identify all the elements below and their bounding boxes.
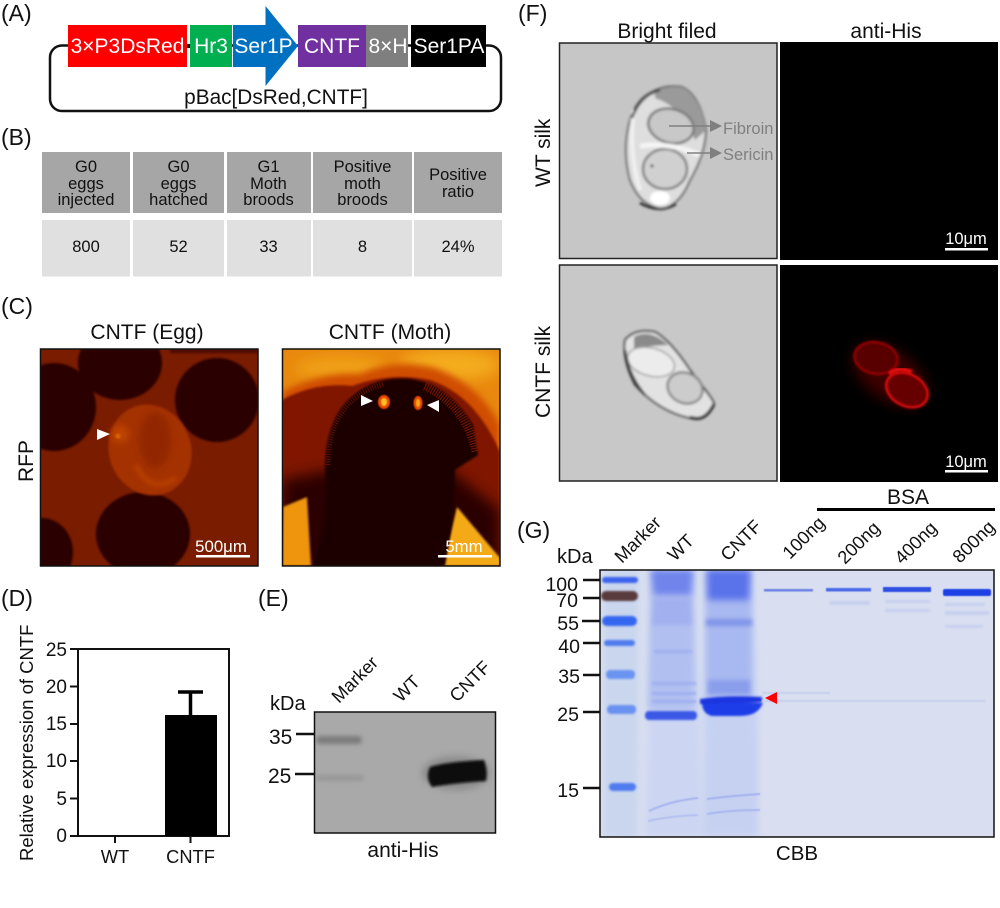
micrograph: WT silk bright field [559,43,777,259]
frame moth [282,349,500,566]
table header text: G0 [167,158,190,176]
y axis title: Relative expression of CNTF [16,625,37,861]
size numbers: 15 [557,780,579,802]
size markers: 25 [268,765,291,788]
table values: 33 [259,238,278,256]
BSA bands [764,587,991,596]
CNTF lane smear [703,630,758,836]
x labels [101,846,215,867]
table header [42,152,502,213]
y axis numbers: 5 [56,789,67,810]
blot frame [314,712,496,833]
arrowhead on egg [97,429,110,440]
table header text: eggs [161,175,196,193]
table header text: broods [337,191,388,209]
BSA header and bracket: BSA [887,486,929,509]
axis label RFP: RFP [15,440,38,482]
table header text: G0 [75,158,97,176]
table header text: injected [58,191,114,209]
lane labels: 400ng [890,517,941,568]
BSA header and bracket [817,486,995,511]
panel: C RFP images [1,293,500,586]
micrograph: WT silk anti-His [780,42,998,260]
x ticks [115,836,190,843]
title: CNTF (Moth): CNTF (Moth) [329,321,451,344]
linker [187,44,190,48]
size numbers: 100 [545,574,578,596]
micrograph: CNTF silk bright field [559,265,777,481]
element: Hr3: Hr3 [194,35,228,58]
y axis numbers [46,640,67,847]
lane labels: CNTF [716,516,765,565]
annotation: Sericin arrow and label [687,146,773,164]
panel: G gel [517,486,999,865]
y axis numbers: 10 [46,751,67,772]
table header text: ratio [442,183,474,201]
table header text: eggs [68,175,104,193]
gel frame [600,570,994,837]
element: Hr3 [190,25,232,67]
plasmid backbone loop [50,46,501,111]
main bands [645,696,763,720]
table header text: Positive [429,166,487,184]
table values row [42,220,502,276]
caption anti-His: anti-His [367,839,439,862]
panel label C: (C) [1,293,33,319]
y axis ticks [70,649,78,836]
table header text: G1 [257,158,280,176]
red arrowhead [765,692,777,704]
panel: E western blot [258,585,496,862]
lane labels [610,512,999,568]
kDa label: kDa [270,693,306,715]
lane labels: CNTF [445,657,494,706]
panel label A: (A) [1,0,32,26]
micrograph: egg [41,350,258,566]
lane labels [327,652,494,707]
element: 3xP3DsRed [68,25,187,67]
blot [314,712,495,833]
y axis numbers: 0 [56,826,67,847]
panel: B table [1,124,502,276]
CNTF bar [165,715,217,836]
element: CNTF: CNTF [304,35,360,58]
y axis numbers: 20 [46,677,67,698]
scale bar WT 10um: 10μm [945,230,987,248]
micrograph: CNTF silk anti-His [780,265,998,482]
arrowheads on moth [361,395,439,412]
table header text: hatched [149,191,208,209]
panel: F silk sections [518,0,998,482]
marker bands [601,577,638,791]
BSA minor bands [830,600,989,628]
marker ticks [295,734,314,774]
size markers [268,726,292,788]
title: CNTF (Egg): CNTF (Egg) [90,321,204,344]
element: CNTF [298,25,366,67]
element: Ser1P arrow [233,6,298,86]
size numbers: 35 [558,666,580,688]
caption CBB: CBB [776,842,818,865]
row title CNTF silk: CNTF silk [532,325,555,418]
panel label E: (E) [258,585,289,611]
table header text: moth [344,175,381,193]
panel label B: (B) [1,124,32,150]
lane labels: 200ng [833,517,884,568]
lane labels: WT [389,671,424,706]
frame egg [40,349,258,566]
frame CNTF bright field [560,265,777,481]
scale bar 500um: 500μm [195,537,247,556]
annotation: Fibroin arrow and label: Fibroin [723,120,773,138]
element: 8xH: 8×H [368,35,408,58]
gel image [600,570,994,837]
annotation: Fibroin arrow and label [669,120,773,138]
scale bar 5mm [438,537,492,558]
plasmid name: pBac[DsRed,CNTF] [184,86,368,109]
panel label F: (F) [518,0,547,26]
element: Ser1PA: Ser1PA [414,35,484,58]
row title WT silk: WT silk [532,118,555,187]
size ticks [582,580,600,788]
element: Ser1P arrow: Ser1P [234,35,293,58]
WT lane smear [646,709,700,836]
size numbers: 40 [558,636,580,658]
table values: 52 [169,238,188,256]
column title Bright filed: Bright filed [617,20,717,43]
y axis numbers: 15 [46,714,67,735]
y axis numbers: 25 [46,640,67,661]
table values [72,238,475,256]
lane labels: Marker [327,652,382,707]
scale bar 5mm: 5mm [445,537,483,556]
table header text: broods [243,191,294,209]
size numbers [545,574,580,802]
panel label D: (D) [1,585,33,611]
size numbers: 55 [557,613,579,635]
kDa label: kDa [557,546,593,568]
element: 3xP3DsRed: 3×P3DsRed [71,35,184,58]
panel: A construct map [1,0,501,111]
lane labels: Marker [610,512,665,567]
lane labels: 100ng [778,512,829,563]
table header text: Moth [250,175,287,193]
element: 8xH [366,25,408,67]
lane labels: 800ng [948,516,999,567]
size numbers: 70 [556,590,578,612]
table values: 800 [72,238,100,256]
table values: 8 [358,238,367,256]
panel label G: (G) [517,517,550,543]
column title anti-His: anti-His [850,20,922,43]
frame WT bright field [560,43,777,258]
micrograph: moth head [282,349,500,566]
size numbers: 25 [557,704,579,726]
element: Ser1PA [411,25,486,67]
table values: 24% [441,238,475,256]
size markers: 35 [269,726,292,749]
low molecular bands [648,794,760,821]
table header text: Positive [334,158,391,176]
annotation: Sericin arrow and label: Sericin [723,146,773,164]
x labels: CNTF [166,846,215,867]
lane labels: WT [663,530,698,565]
x labels: WT [101,846,129,867]
scale bar CNTF 10um: 10μm [945,453,987,471]
plot frame [78,649,229,836]
panel: D bar chart [1,585,229,867]
table header text [58,158,487,209]
faint target band across lanes [762,693,985,701]
error bar [178,692,203,715]
